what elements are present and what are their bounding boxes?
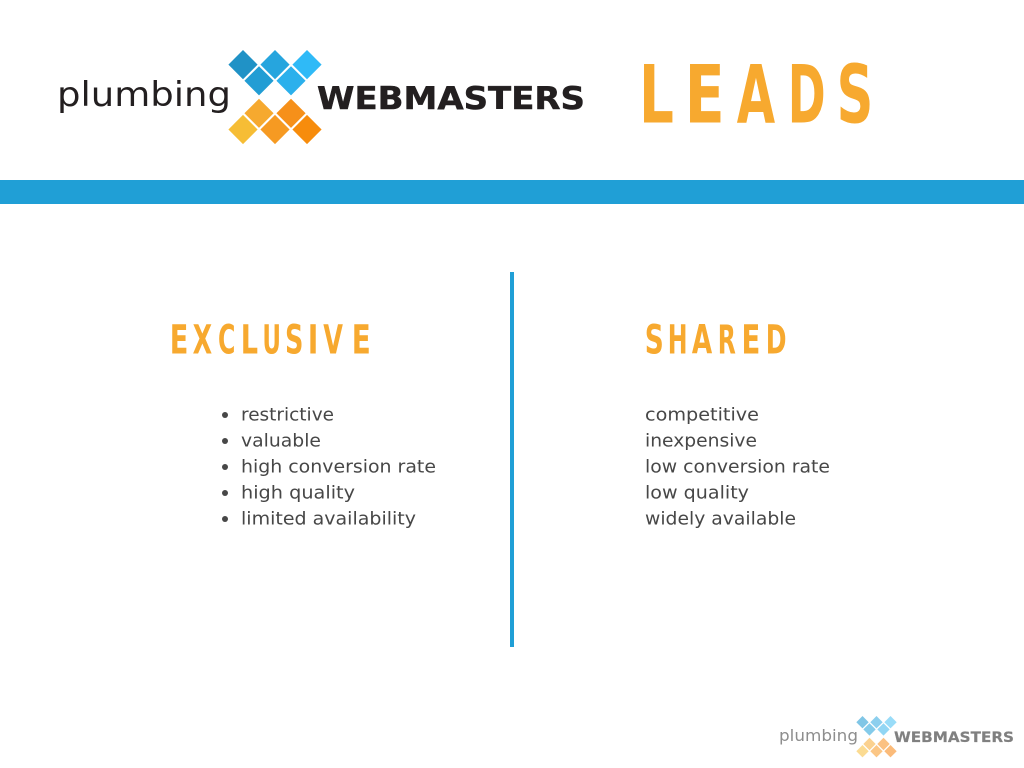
exclusive list text: [241, 404, 436, 530]
shared list text: widely available: [645, 508, 796, 530]
heading: SHARED: H: [668, 318, 688, 364]
logo icon: orange diamonds: [228, 99, 322, 144]
logo icon: blue diamonds: [228, 50, 322, 95]
list: exclusive traits: [222, 404, 436, 530]
title: LEADS: S: [837, 48, 873, 142]
shared list text: [645, 404, 830, 530]
bullet dots: [222, 412, 228, 522]
title: LEADS: E: [685, 48, 725, 142]
heading: SHARED: D: [766, 318, 786, 364]
heading: EXCLUSIVE: E: [352, 318, 371, 364]
heading: SHARED: S: [645, 318, 664, 364]
footer icon: blue diamonds: [856, 716, 897, 736]
heading: SHARED: A: [692, 318, 712, 364]
heading: EXCLUSIVE: V: [323, 318, 343, 364]
heading: EXCLUSIVE: S: [285, 318, 303, 364]
footer wordmark: webmasters: WEBMASTERS: [894, 730, 1014, 746]
logo wordmark: webmasters: WEBMASTERS: [317, 81, 585, 117]
heading: SHARED: E: [742, 318, 760, 364]
heading: EXCLUSIVE: U: [262, 318, 281, 364]
footer wordmark: plumbing: plumbing: [779, 726, 858, 745]
shared list text: low quality: [645, 482, 749, 504]
shared list text: inexpensive: [645, 430, 757, 452]
exclusive list text: high conversion rate: [241, 456, 436, 478]
heading: EXCLUSIVE: I: [308, 318, 318, 364]
exclusive list text: valuable: [241, 430, 321, 452]
title: LEADS: A: [737, 48, 775, 142]
heading: EXCLUSIVE: X: [193, 318, 212, 364]
exclusive list text: high quality: [241, 482, 355, 504]
exclusive list text: restrictive: [241, 404, 334, 426]
heading: EXCLUSIVE: C: [218, 318, 235, 364]
shared list text: competitive: [645, 404, 759, 426]
title: LEADS: D: [788, 48, 826, 142]
shared list text: low conversion rate: [645, 456, 830, 478]
panel: shared leads: [645, 318, 830, 530]
heading: SHARED: R: [718, 318, 736, 364]
logo wordmark: plumbing: plumbing: [57, 75, 231, 115]
footer icon: orange diamonds: [856, 738, 897, 757]
title: LEADS: L: [639, 48, 674, 142]
heading: EXCLUSIVE: L: [241, 318, 258, 364]
vertical divider between columns: [510, 272, 514, 647]
exclusive list text: limited availability: [241, 508, 416, 530]
footer logo: plumbing webmasters watermark: [779, 716, 1014, 757]
header blue bar: [0, 180, 1024, 204]
heading: EXCLUSIVE: E: [170, 318, 188, 364]
panel: exclusive leads: [170, 318, 436, 530]
header logo: plumbing webmasters: [57, 50, 585, 144]
